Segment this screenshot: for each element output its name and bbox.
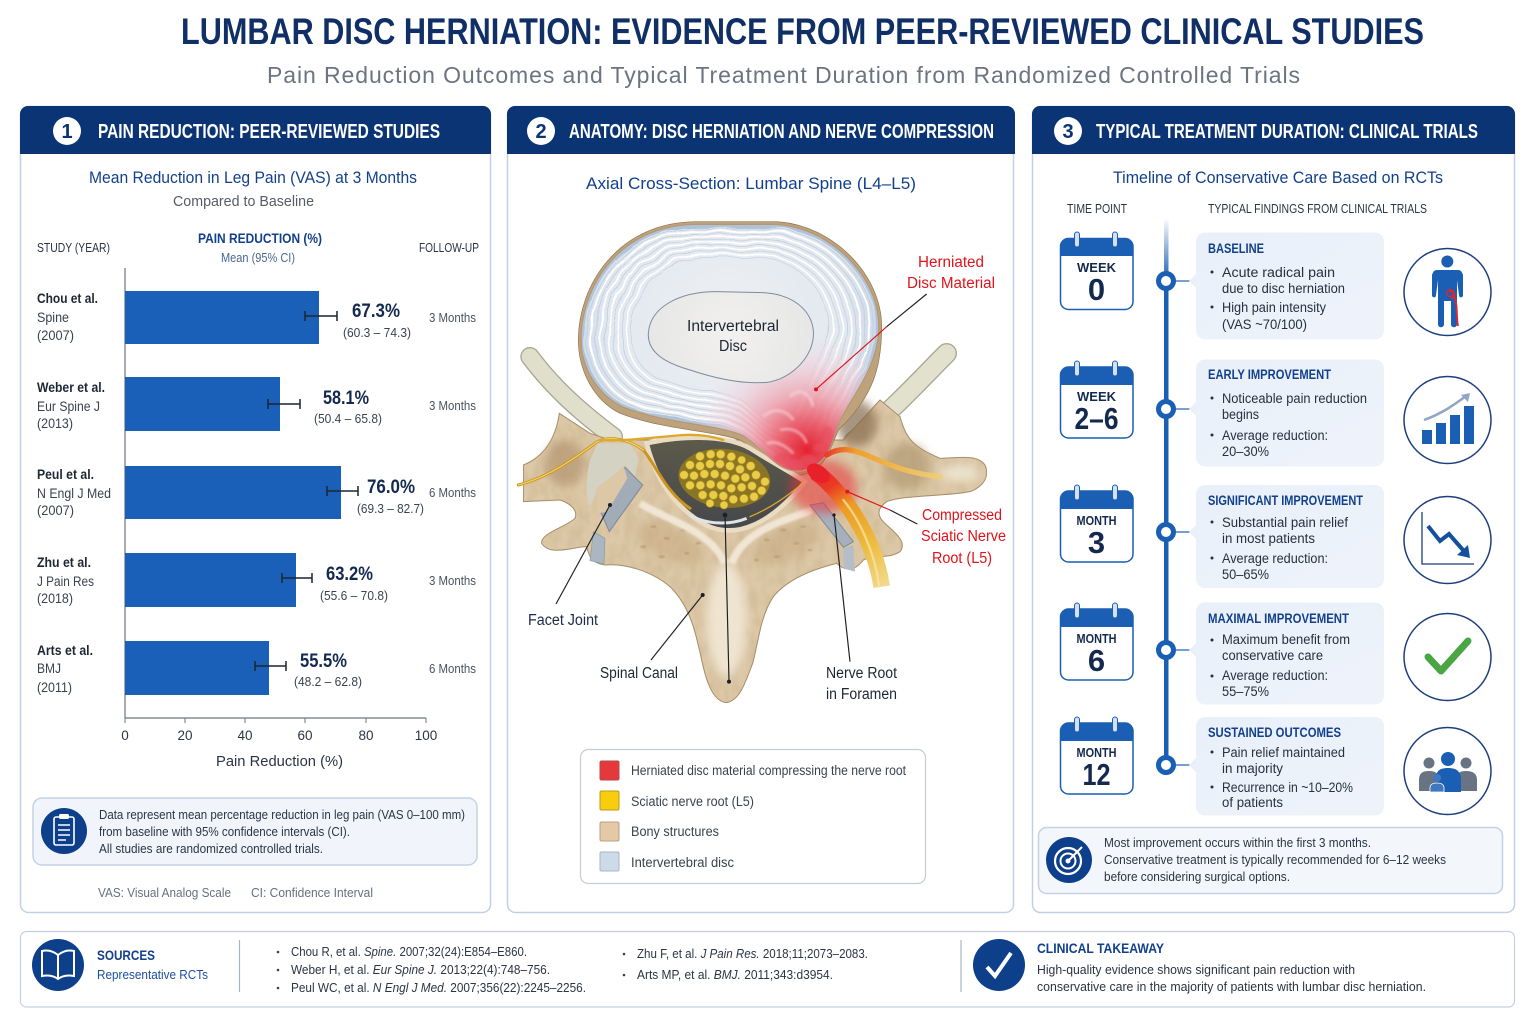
sources label: Representative RCTs	[97, 967, 208, 982]
axis tick labels: 100	[415, 728, 437, 743]
clinical takeaway: CLINICAL TAKEAWAY	[1037, 940, 1165, 956]
row: Weber: 3 Months	[429, 399, 476, 413]
calendar: month 6: MONTH	[1076, 631, 1116, 646]
leader lines	[556, 294, 927, 682]
label: compressed sciatic nerve root: Root (L5)	[932, 550, 992, 567]
calendar: week 2-6	[1060, 361, 1133, 438]
clinical takeaway: conservative care in the majority of patients with lumbar disc herniation.	[1037, 979, 1426, 994]
row: Weber: Eur Spine J	[37, 399, 100, 414]
label: herniated disc material: Disc Material	[907, 275, 995, 292]
finding card: maximal improvement	[1189, 602, 1384, 704]
finding card: early improvement: Average reduction:	[1222, 428, 1328, 443]
finding card: sustained outcomes: SUSTAINED OUTCOMES	[1208, 725, 1341, 740]
abbreviations: VAS: Visual Analog Scale	[98, 885, 231, 900]
finding card: baseline: due to disc herniation	[1222, 281, 1345, 296]
reference list: Chou R, et al. Spine. 2007;32(24):E854–E860.	[291, 945, 527, 959]
row: Arts: 6 Months	[429, 662, 476, 676]
finding card: maximal improvement: conservative care	[1222, 648, 1323, 663]
finding card: sustained outcomes: Recurrence in ~10–20%	[1222, 780, 1353, 795]
footer band	[20, 932, 1514, 1007]
icon: person with leg pain	[1404, 248, 1491, 336]
finding card: maximal improvement: MAXIMAL IMPROVEMENT	[1208, 611, 1350, 626]
finding card: significant improvement: Average reduction:	[1222, 551, 1328, 566]
finding card: early improvement: 20–30%	[1222, 444, 1269, 459]
finding card: significant improvement: in most patients	[1222, 531, 1315, 546]
row: Chou	[37, 291, 476, 344]
calendar: month 6: 6	[1088, 643, 1105, 678]
row: Zhu: 3 Months	[429, 574, 476, 588]
row: Arts: BMJ	[37, 661, 61, 676]
icon: rising bar chart	[1404, 376, 1491, 464]
finding card: baseline: BASELINE	[1208, 241, 1264, 256]
reference list: Peul WC, et al. N Engl J Med. 2007;356(22):2245–2256.	[291, 981, 586, 995]
column heading: time point: TIME POINT	[1067, 202, 1127, 216]
legend: Intervertebral disc	[631, 855, 734, 870]
finding card: sustained outcomes: Pain relief maintained	[1222, 745, 1345, 760]
intervertebral disc	[580, 224, 880, 472]
axis tick labels: 80	[358, 728, 374, 743]
calendar: month 3	[1060, 485, 1133, 562]
row: Peul: N Engl J Med	[37, 486, 111, 501]
stage: month 3	[1060, 485, 1491, 588]
label: nerve root in foramen: Nerve Root	[826, 665, 898, 682]
finding card: sustained outcomes	[1189, 717, 1384, 816]
finding card: early improvement: begins	[1222, 407, 1259, 422]
chart heading: Mean Reduction in Leg Pain (VAS) at 3 Months	[89, 168, 417, 187]
finding card: early improvement	[1189, 360, 1384, 466]
row: Arts: 55.5%	[300, 651, 347, 672]
cauda equina	[676, 444, 773, 512]
spinal canal	[647, 438, 805, 530]
row: Weber: Weber et al.	[37, 380, 105, 395]
label: intervertebral disc: Intervertebral	[687, 318, 779, 335]
label: compressed sciatic nerve root	[921, 507, 1006, 567]
data note: Data represent mean percentage reduction in leg pain (VAS 0–100 mm)	[99, 807, 465, 822]
pedicle bars	[530, 353, 947, 442]
row: Zhu: 63.2%	[326, 564, 373, 585]
sources label	[97, 947, 208, 982]
calendar: week 0: 0	[1088, 272, 1105, 307]
calendar: month 3: 3	[1088, 525, 1105, 560]
row: Chou: 67.3%	[352, 301, 400, 322]
reference list: Zhu F, et al. J Pain Res. 2018;11;2073–2083.	[637, 947, 868, 961]
row: Arts: (48.2 – 62.8)	[294, 675, 362, 689]
vertebral body edge	[578, 222, 882, 475]
icon: open book	[32, 939, 84, 991]
bone speckles	[640, 525, 813, 562]
calendar: month 12	[1060, 717, 1133, 794]
data note: All studies are randomized controlled trials.	[99, 841, 323, 856]
stage: month 6	[1060, 602, 1491, 704]
panel 1: pain reduction	[20, 106, 491, 912]
row: Peul: 76.0%	[367, 477, 415, 498]
row: Zhu	[37, 553, 476, 607]
abbreviations	[98, 885, 373, 900]
stage: month 12	[1060, 717, 1491, 816]
finding card: maximal improvement: 55–75%	[1222, 684, 1269, 699]
legend: Bony structures	[631, 824, 719, 839]
row: Arts: Arts et al.	[37, 643, 93, 658]
icon: check badge	[973, 939, 1025, 991]
calendar: week 0	[1060, 232, 1133, 310]
finding card: early improvement: EARLY IMPROVEMENT	[1208, 367, 1332, 382]
label: compressed sciatic nerve root: Compressed	[922, 507, 1002, 524]
label: compressed sciatic nerve root: Sciatic Nerve	[921, 528, 1006, 545]
bone shading	[545, 400, 980, 677]
timeline heading: Timeline of Conservative Care Based on RCTs	[1113, 168, 1443, 187]
axis tick labels	[121, 728, 437, 743]
row: Chou: (60.3 – 74.3)	[343, 326, 411, 340]
calendar: month 3: MONTH	[1076, 513, 1116, 528]
row: Zhu: (2018)	[37, 591, 73, 606]
stage: week 0	[1060, 232, 1491, 340]
legend: Sciatic nerve root (L5)	[631, 794, 754, 809]
label: facet joint: Facet Joint	[528, 612, 599, 629]
column heading: pain reduction	[198, 231, 322, 265]
label: herniated disc material: Herniated	[918, 254, 984, 271]
clinical takeaway: High-quality evidence shows significant pain reduction with	[1037, 962, 1355, 977]
axis title: Pain Reduction (%)	[216, 753, 343, 770]
panel 1 header	[20, 106, 491, 154]
finding card: significant improvement	[1189, 485, 1384, 588]
label: herniated disc material	[907, 254, 995, 292]
icon: green check	[1404, 614, 1491, 700]
reference list	[277, 945, 868, 995]
panel 2 header: ANATOMY: DISC HERNIATION AND NERVE COMPRESSION	[569, 121, 994, 143]
legend	[580, 750, 926, 884]
label: intervertebral disc	[687, 318, 779, 355]
summary note	[1038, 828, 1502, 894]
row: Peul: (69.3 – 82.7)	[357, 502, 424, 516]
calendar: week 2-6: 2–6	[1074, 401, 1118, 436]
finding card: early improvement: Noticeable pain reduction	[1222, 391, 1367, 406]
summary note: Conservative treatment is typically recommended for 6–12 weeks	[1104, 852, 1446, 867]
icon: target	[1046, 837, 1092, 883]
panel 1 header: 1	[61, 121, 73, 143]
icon: patient group	[1404, 728, 1491, 814]
row: Chou: (2007)	[37, 328, 74, 343]
subtitle: Pain Reduction Outcomes and Typical Treatment Duration from Randomized Controlled Trials	[267, 62, 1300, 88]
finding card: baseline: (VAS ~70/100)	[1222, 317, 1307, 332]
chart subheading: Compared to Baseline	[173, 193, 314, 210]
panel 3 header: 3	[1062, 121, 1074, 143]
panel 2 header: 2	[535, 121, 547, 143]
icon: falling pain chart	[1404, 496, 1491, 584]
anatomy illustration: lumbar vertebra	[518, 222, 987, 703]
nerves	[518, 435, 940, 587]
finding card: maximal improvement: Maximum benefit from	[1222, 632, 1350, 647]
calendar: month 6	[1060, 603, 1133, 680]
inflamed tissue	[790, 460, 857, 513]
panel 1 header: PAIN REDUCTION: PEER-REVIEWED STUDIES	[98, 121, 440, 143]
legend: Herniated disc material compressing the nerve root	[631, 763, 906, 778]
row: Weber	[37, 377, 476, 431]
label: nerve root in foramen: in Foramen	[826, 686, 897, 703]
panel 3 header	[1032, 106, 1515, 154]
row: Weber: (50.4 – 65.8)	[314, 412, 382, 426]
abbreviations: CI: Confidence Interval	[251, 885, 373, 900]
calendar: week 2-6: WEEK	[1077, 389, 1117, 404]
row: Peul: 6 Months	[429, 486, 476, 500]
column heading: pain reduction: PAIN REDUCTION (%)	[198, 231, 322, 246]
icon: clipboard	[41, 808, 87, 854]
calendar: month 12: 12	[1082, 757, 1110, 792]
row: Chou: 3 Months	[429, 311, 476, 325]
axis tick labels: 60	[297, 728, 313, 743]
reference list: Weber H, et al. Eur Spine J. 2013;22(4):748–756.	[291, 963, 550, 977]
column heading: findings: TYPICAL FINDINGS FROM CLINICAL TRIALS	[1208, 202, 1427, 216]
row: Weber: (2013)	[37, 416, 73, 431]
leader dots	[608, 387, 849, 684]
summary note: before considering surgical options.	[1104, 869, 1290, 884]
column heading: study: STUDY (YEAR)	[37, 241, 110, 255]
row: Arts	[37, 641, 476, 695]
timeline axis	[1158, 218, 1190, 772]
herniated material	[702, 348, 870, 471]
axis tick labels: 40	[237, 728, 253, 743]
label: spinal canal: Spinal Canal	[600, 665, 678, 682]
calendar: week 0: WEEK	[1077, 260, 1117, 275]
finding card: maximal improvement: Average reduction:	[1222, 668, 1328, 683]
bone ridges and facet joints	[587, 443, 855, 572]
column heading: follow-up: FOLLOW-UP	[419, 241, 479, 255]
finding card: baseline	[1189, 232, 1384, 340]
label: nerve root in foramen	[826, 665, 898, 703]
finding card: baseline: High pain intensity	[1222, 300, 1326, 315]
row: Chou: Spine	[37, 310, 69, 325]
panel 2: anatomy	[507, 106, 1015, 912]
label: intervertebral disc: Disc	[719, 338, 747, 355]
row: Zhu: (55.6 – 70.8)	[320, 589, 388, 603]
finding card: sustained outcomes: of patients	[1222, 795, 1283, 810]
panel 3: treatment duration	[1032, 106, 1515, 912]
data note	[33, 798, 477, 865]
reference list: Arts MP, et al. BMJ. 2011;343:d3954.	[637, 968, 833, 982]
summary note: Most improvement occurs within the first 3 months.	[1104, 835, 1371, 850]
axis tick labels: 20	[177, 728, 193, 743]
stage: week 2-6	[1060, 360, 1491, 466]
row: Peul: (2007)	[37, 503, 74, 518]
row: Weber: 58.1%	[323, 388, 369, 409]
finding card: sustained outcomes: in majority	[1222, 761, 1283, 776]
row: Zhu: J Pain Res	[37, 574, 94, 589]
finding card: significant improvement: SIGNIFICANT IMPROVEMENT	[1208, 493, 1364, 508]
row: Arts: (2011)	[37, 680, 72, 695]
calendar: month 12: MONTH	[1076, 745, 1116, 760]
column heading: pain reduction: Mean (95% CI)	[221, 251, 295, 265]
axis tick labels: 0	[121, 728, 129, 743]
sources label: SOURCES	[97, 947, 155, 963]
row: Zhu: Zhu et al.	[37, 555, 91, 570]
finding card: baseline: Acute radical pain	[1222, 265, 1335, 280]
diagram heading: Axial Cross-Section: Lumbar Spine (L4–L5)	[586, 174, 916, 193]
panel 2 header	[507, 106, 1015, 154]
row: Chou: Chou et al.	[37, 291, 98, 306]
bone	[523, 400, 987, 703]
finding card: significant improvement: Substantial pain relief	[1222, 515, 1348, 530]
clinical takeaway	[1037, 940, 1426, 994]
finding card: significant improvement: 50–65%	[1222, 567, 1269, 582]
data note: from baseline with 95% confidence intervals (CI).	[99, 824, 350, 839]
bar chart	[37, 268, 476, 770]
row: Peul: Peul et al.	[37, 467, 94, 482]
row: Peul	[37, 466, 476, 519]
